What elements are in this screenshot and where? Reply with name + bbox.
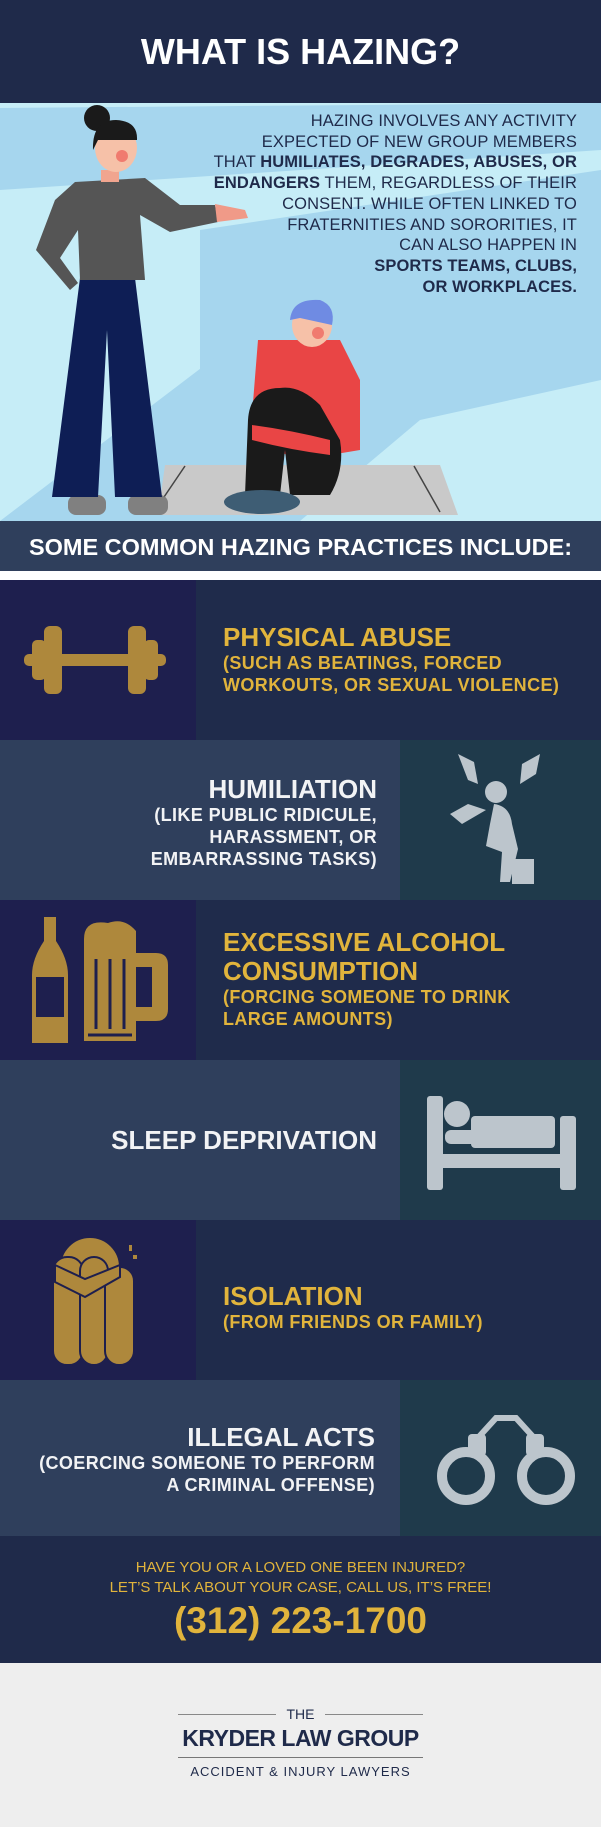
woman xyxy=(36,105,248,515)
icon: dumbbell xyxy=(24,626,166,694)
intro text: THAT HUMILIATES, DEGRADES, ABUSES, OR xyxy=(214,153,577,171)
text: alcohol: LARGE AMOUNTS) xyxy=(223,1009,393,1029)
text: sleep deprivation: SLEEP DEPRIVATION xyxy=(111,1125,377,1155)
text: physical abuse: WORKOUTS, OR SEXUAL VIOLENCE) xyxy=(223,675,559,695)
text: physical abuse xyxy=(223,622,559,695)
text: isolation: (FROM FRIENDS OR FAMILY) xyxy=(223,1312,483,1332)
intro text: SPORTS TEAMS, CLUBS, xyxy=(374,257,577,275)
logo xyxy=(178,1706,423,1779)
icon: handcuffs xyxy=(437,1415,575,1505)
icon: isolated person xyxy=(54,1238,137,1364)
intro text: HAZING INVOLVES ANY ACTIVITY xyxy=(311,112,577,130)
illustration panel xyxy=(0,103,601,521)
text: humiliation xyxy=(151,774,377,869)
intro text: EXPECTED OF NEW GROUP MEMBERS xyxy=(262,133,577,151)
text: humiliation: HUMILIATION xyxy=(208,774,377,804)
text: alcohol: EXCESSIVE ALCOHOL xyxy=(223,927,505,957)
logo: THE xyxy=(286,1706,314,1722)
icon: bottle and mug xyxy=(32,917,168,1043)
intro text xyxy=(214,112,577,296)
text: illegal acts: (COERCING SOMEONE TO PERFORM xyxy=(39,1453,375,1473)
title band: WHAT IS HAZING? xyxy=(141,31,460,72)
intro text: CONSENT. WHILE OFTEN LINKED TO xyxy=(282,195,577,213)
intro text: FRATERNITIES AND SORORITIES, IT xyxy=(287,216,577,234)
row: illegal acts xyxy=(0,1380,601,1536)
intro text: OR WORKPLACES. xyxy=(423,278,577,296)
boy xyxy=(224,300,360,514)
icon: humiliated person xyxy=(450,754,540,884)
call to action: LET’S TALK ABOUT YOUR CASE, CALL US, IT’S FREE! xyxy=(110,1579,491,1596)
text: isolation xyxy=(223,1281,483,1332)
practices heading: SOME COMMON HAZING PRACTICES INCLUDE: xyxy=(29,534,572,560)
icon: bed xyxy=(427,1096,576,1190)
text: alcohol xyxy=(223,927,511,1029)
row: physical abuse xyxy=(0,580,601,740)
intro text: CAN ALSO HAPPEN IN xyxy=(399,236,577,254)
title band xyxy=(0,0,601,103)
row: sleep deprivation xyxy=(0,1060,601,1220)
text: isolation: ISOLATION xyxy=(223,1281,363,1311)
text: physical abuse: PHYSICAL ABUSE xyxy=(223,622,451,652)
intro text: ENDANGERS THEM, REGARDLESS OF THEIR xyxy=(214,174,577,192)
text: illegal acts: ILLEGAL ACTS xyxy=(187,1422,375,1452)
text: humiliation: (LIKE PUBLIC RIDICULE, xyxy=(154,805,377,825)
row: isolation xyxy=(0,1220,601,1380)
text: alcohol: CONSUMPTION xyxy=(223,956,418,986)
text: illegal acts xyxy=(39,1422,375,1495)
text: physical abuse: (SUCH AS BEATINGS, FORCED xyxy=(223,653,502,673)
call to action xyxy=(0,1536,601,1663)
logo: ACCIDENT & INJURY LAWYERS xyxy=(190,1764,411,1779)
practices heading xyxy=(0,521,601,571)
call to action: HAVE YOU OR A LOVED ONE BEEN INJURED? xyxy=(136,1559,465,1576)
text: humiliation: EMBARRASSING TASKS) xyxy=(151,849,377,869)
logo: KRYDER LAW GROUP xyxy=(182,1725,419,1751)
phone number: (312) 223-1700 xyxy=(174,1600,427,1641)
row: alcohol xyxy=(0,900,601,1060)
floor mat xyxy=(158,465,458,515)
text: alcohol: (FORCING SOMEONE TO DRINK xyxy=(223,987,511,1007)
row: humiliation xyxy=(0,740,601,900)
text: humiliation: HARASSMENT, OR xyxy=(209,827,377,847)
text: illegal acts: A CRIMINAL OFFENSE) xyxy=(166,1475,375,1495)
